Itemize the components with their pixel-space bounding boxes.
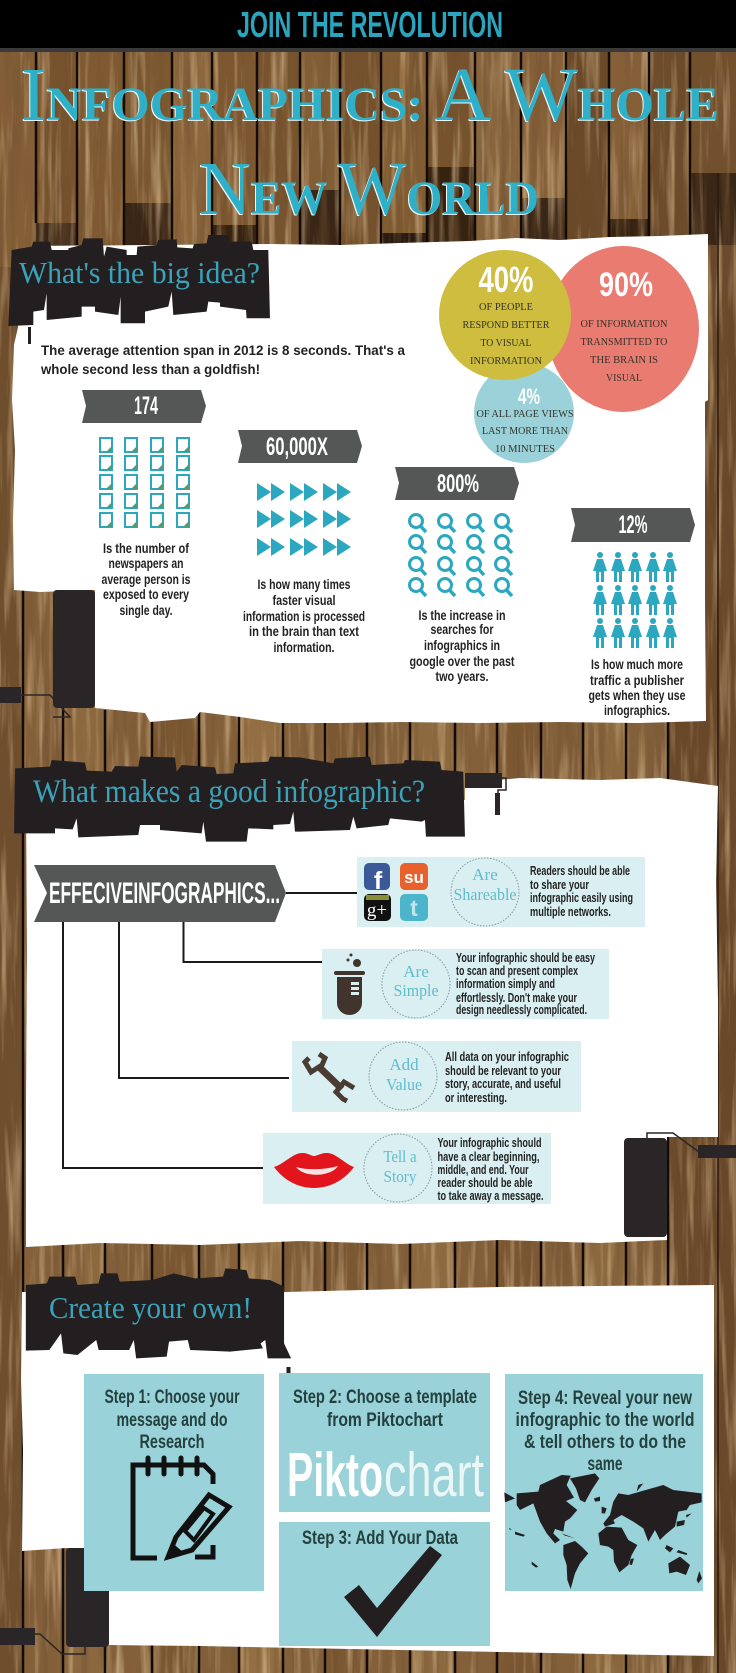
card: are simple [322,949,609,1019]
step 1 text: Research [140,1432,204,1453]
ribbon: 12% [571,508,695,542]
logo: piktochart: Pikto [287,1441,383,1510]
heading: what's the big idea [8,235,270,326]
stat column: 60,000X [238,430,365,655]
caption: 174: single day. [120,602,172,618]
circle: 40%: TO VISUAL [480,338,532,349]
top banner [0,0,736,52]
main title: INFOGRAPHICS: A WHOLE [20,54,718,138]
heading: what makes a good infographic [14,757,465,842]
step 1 text [104,1387,240,1453]
icon: google plus [364,894,391,921]
panel: what makes a good infographic paper [26,778,718,1247]
stat column: 800% [395,467,519,684]
circle: 4% [474,363,574,463]
caption: 12%: gets when they use [588,687,686,703]
badge: are shareable: Shareable [454,885,516,904]
icon: stumbleupon: su [404,868,424,887]
heading: what makes a good infographic: What makes a good infographic? [33,774,425,810]
badge: are simple [382,950,450,1018]
caption: 800% [410,607,515,684]
badge: tell a story: Story [384,1167,417,1186]
circle: 40%: 40% [478,259,534,300]
circle: 90%: TRANSMITTED TO [580,337,668,348]
caption: 800%: Is the increase in [418,607,506,623]
caption: 60,000X: faster visual [272,592,336,608]
step 4 text: Step 4: Reveal your new [518,1388,692,1409]
caption: 174: Is the number of [103,540,189,556]
description: shareable: multiple networks. [530,905,611,919]
icon: wrench [305,1054,354,1101]
description: simple: effortlessly. Don't make your [456,991,577,1005]
description: simple: design needlessly complicated. [456,1003,587,1017]
description: simple: Your infographic should be easy [456,951,595,965]
description: value: story, accurate, and useful [445,1077,561,1091]
step 4 [504,1374,703,1591]
icon: google plus: g+ [367,900,387,921]
circle: 4%: 10 MINUTES [495,444,555,455]
intro text: The average attention span in 2012 is 8 seconds. That's a [41,342,405,358]
circle: 90%: VISUAL [606,373,642,384]
step 4 text: & tell others to do the [524,1432,686,1453]
stat column: 12% [571,508,695,718]
circle stats [439,246,699,463]
circle: 40%: INFORMATION [470,356,542,367]
description: shareable: infographic easily using [530,891,633,905]
icon: facebook: f [374,867,383,895]
caption: 800%: infographics in [424,637,500,653]
step 3 [279,1522,490,1646]
badge: add value [369,1042,437,1110]
caption: 60,000X: information is processed [243,608,365,624]
description: shareable: to share your [530,878,589,892]
caption: 60,000X: information. [274,639,334,655]
badge: are shareable: Are [472,865,498,884]
main title: NEW WORLD [199,147,539,231]
circle: 4%: LAST MORE THAN [482,426,568,437]
intro text: whole second less than a goldfish! [40,361,260,377]
icon: twitter: t [410,895,418,921]
stat column: 174 [82,390,206,618]
circle: 90% [547,246,699,412]
ribbon: 60,000X: 60,000X [266,433,328,461]
step 2 text: Step 2: Choose a template [293,1387,477,1408]
card: tell a story [263,1133,551,1204]
step 2 text: from Piktochart [327,1410,444,1431]
step 4 text [516,1388,694,1475]
step 2 [279,1373,490,1512]
caption: 174: newspapers an [108,555,184,571]
main title: INFOGRAPHICS: A WHOLE [21,53,719,137]
panel: what's the big idea paper [12,234,708,723]
circle: 40%: OF PEOPLE [479,302,533,313]
badge: are simple: Are [403,962,429,981]
badge: add value: Add [389,1055,419,1074]
badge: add value: Value [386,1075,422,1094]
icon: notepad and pencil [133,1458,229,1558]
caption: 12%: infographics. [604,702,670,718]
logo: piktochart: chart [384,1441,484,1510]
paint roller left one [0,590,95,717]
icon: lips [274,1153,354,1188]
description: story: Your infographic should [438,1136,542,1150]
top banner: JOIN THE REVOLUTION [237,4,503,45]
caption: 60,000X: Is how many times [258,576,351,592]
caption: 800%: google over the past [410,653,515,669]
icon: world map [504,1473,702,1589]
caption: 800%: two years. [436,668,488,684]
icon: twitter [400,894,428,921]
badge: tell a story [364,1134,432,1202]
description: story: middle, and end. Your [438,1163,529,1177]
step 1 text: Step 1: Choose your [104,1387,240,1408]
step 4 text: infographic to the world [516,1410,694,1431]
intro text [40,342,405,377]
caption: 60,000X: in the brain than text [249,623,359,639]
ribbon: 800%: 800% [437,470,479,498]
description: value: or interesting. [445,1091,507,1105]
circle: 90%: 90% [599,266,653,304]
caption: 174 [102,540,191,618]
description: story: have a clear beginning, [438,1150,540,1164]
paint roller small, section two [465,773,506,815]
panel: create your own paper [21,1285,714,1656]
description: simple [456,951,595,1017]
circle: 90%: THE BRAIN IS [590,355,658,366]
card: add value [292,1041,581,1112]
description: story: to take away a message. [438,1189,544,1203]
heading: create your own: Create your own! [49,1290,252,1325]
icon: stumbleupon [400,863,428,890]
ribbon: effective infographics [34,865,286,922]
main title [20,53,719,232]
main title: NEW WORLD [198,148,538,232]
description: shareable: Readers should be able [530,864,630,878]
icon: test tube [334,954,365,1015]
caption: 174: exposed to every [103,586,189,602]
heading: what's the big idea: What's the big idea? [19,255,260,290]
step 2 text [293,1387,477,1431]
ribbon: 174 [82,390,206,423]
ribbon: 174: 174 [134,392,158,420]
circle: 40% [439,250,571,380]
icons: fast-forward arrows [257,483,351,556]
badge: are shareable [451,858,519,926]
ribbon: 800% [395,467,519,500]
ribbon: 60,000X [238,430,362,463]
badge: tell a story: Tell a [384,1147,417,1166]
ribbon: 12%: 12% [618,511,648,539]
connector lines [63,893,357,1168]
badge: are simple: Simple [394,981,438,1000]
description: shareable [530,864,633,919]
caption: 800%: searches for [430,621,494,637]
ribbon: effective infographics: EFFECIVEINFOGRAPHICS... [49,877,280,910]
circle: 40%: RESPOND BETTER [462,320,550,331]
icons: newspapers [100,438,189,527]
caption: 12%: traffic a publisher [590,672,684,688]
step 1 text: message and do [116,1410,228,1431]
circle: 90%: OF INFORMATION [580,319,668,330]
circle: 4%: 4% [518,384,540,409]
icon: check mark [344,1546,442,1637]
description: value [445,1050,569,1105]
caption: 60,000X [243,576,365,655]
paint roller right [624,1133,736,1237]
description: story [438,1136,544,1203]
card: are shareable [357,857,645,927]
description: value: should be relevant to your [445,1064,561,1078]
step 3 text: Step 3: Add Your Data [302,1528,458,1549]
heading: create your own [26,1268,291,1358]
icon: facebook [364,863,390,895]
caption: 12%: Is how much more [591,656,683,672]
caption: 12% [588,656,686,718]
caption: 174: average person is [102,571,191,587]
step 1 [84,1374,264,1591]
description: story: reader should be able [438,1176,533,1190]
icons: magnifiers [410,514,512,596]
description: value: All data on your infographic [445,1050,569,1064]
description: simple: information simply and [456,977,555,991]
icons: people [593,552,677,648]
paint roller bottom [0,1548,109,1654]
description: simple: to scan and present complex [456,964,578,978]
circle: 4%: OF ALL PAGE VIEWS [476,409,574,420]
step 4 text: same [588,1454,622,1475]
